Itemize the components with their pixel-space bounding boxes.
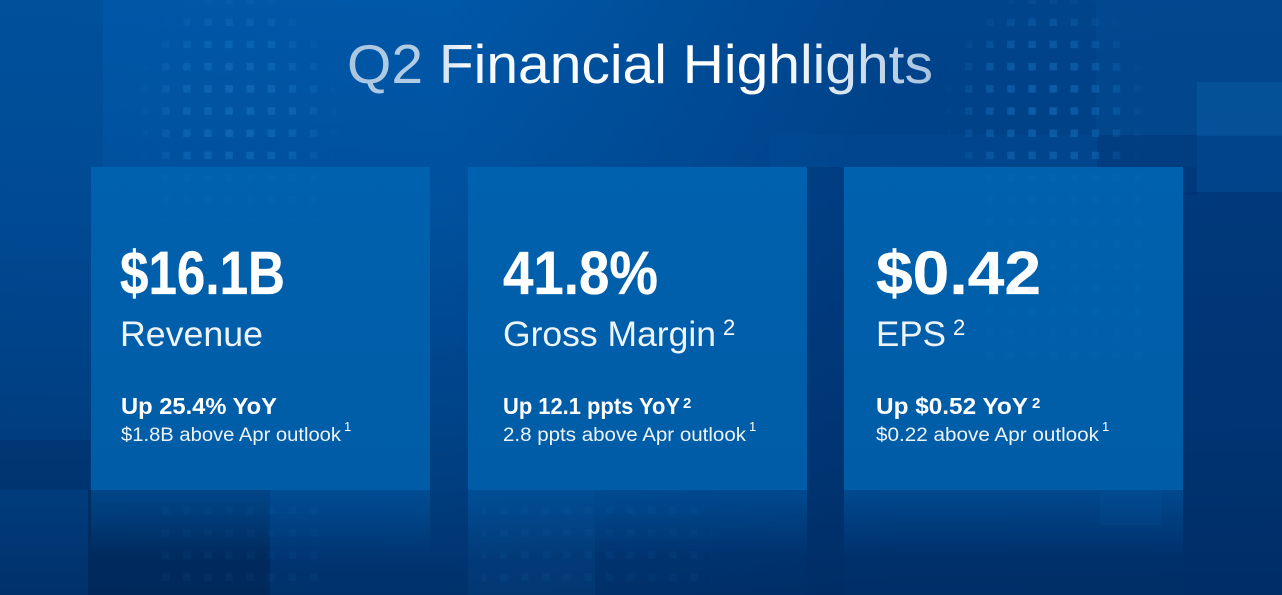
revenue value: $16.1B	[120, 239, 285, 307]
card background: revenue	[91, 167, 430, 490]
footnote marker 2: 2	[1032, 395, 1040, 412]
dot grid: left	[162, 18, 316, 159]
title: Q2 Financial Highlights	[347, 33, 933, 95]
card reflections	[91, 490, 1183, 555]
eps value: $0.42	[876, 239, 1041, 307]
footnote marker 2: 2	[723, 315, 735, 340]
panel: eps	[844, 167, 1183, 490]
panel: gross margin	[468, 167, 807, 490]
reflected dot grid: center	[482, 505, 712, 595]
footnote marker 2: 2	[953, 315, 965, 340]
dot grid: right	[965, 1, 1120, 160]
eps label: EPS	[876, 315, 946, 354]
card background: gross margin	[468, 167, 807, 490]
faint dots over cards	[160, 170, 320, 220]
gross margin label: Gross Margin	[503, 315, 716, 354]
footnote marker 1: 1	[1102, 419, 1109, 434]
revenue label: Revenue	[120, 315, 263, 354]
gross margin outlook note: 2.8 ppts above Apr outlook	[503, 425, 747, 446]
footnote marker 1: 1	[344, 419, 351, 434]
revenue year over year: Up 25.4% YoY	[121, 393, 277, 419]
footnote marker 1: 1	[749, 419, 756, 434]
gross margin value: 41.8%	[503, 239, 658, 307]
reflected dot grid: left	[160, 505, 320, 595]
revenue outlook note: $1.8B above Apr outlook	[121, 425, 342, 446]
eps outlook note: $0.22 above Apr outlook	[876, 425, 1100, 446]
card background: eps	[844, 167, 1183, 490]
footnote marker 2: 2	[683, 395, 691, 412]
panel: revenue	[91, 167, 430, 490]
faint dots over eps card	[985, 170, 1145, 360]
eps year over year: Up $0.52 YoY	[876, 393, 1028, 419]
gross margin year over year: Up 12.1 ppts YoY	[503, 393, 680, 419]
